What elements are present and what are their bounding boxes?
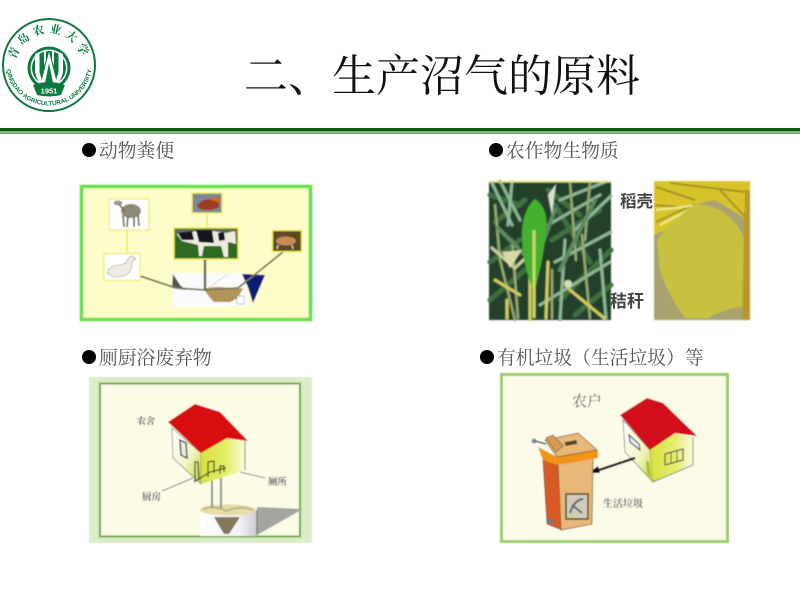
panel: animal manure diagram	[82, 186, 310, 320]
icon: pig	[272, 230, 302, 252]
icon: rooster	[192, 193, 222, 213]
logo: Qingdao Agricultural University	[2, 18, 96, 112]
label: toilet with leader line: 厕所	[268, 476, 288, 488]
label: straw: 秸秆	[610, 291, 644, 311]
label: kitchen with leader line: 厨房	[142, 491, 162, 503]
label: farmer household: 农户	[572, 393, 602, 410]
icon: dairy cows	[174, 228, 238, 259]
pipes to pit	[140, 252, 283, 290]
logo: Qingdao Agricultural University: 1951	[41, 86, 57, 96]
label: rice husk: 稻壳	[620, 191, 654, 211]
photo: yellow husk pile	[654, 181, 750, 320]
icon: sheep	[109, 199, 149, 230]
heading: organic garbage: 有机垃圾（生活垃圾）等	[497, 347, 704, 369]
pipes	[212, 478, 221, 508]
title: 二、生产沼气的原料	[244, 52, 640, 101]
arrow: house to bin	[589, 458, 635, 473]
logo: Qingdao Agricultural University: QINGDAO AGRICULTURAL UNIVERSITY	[6, 68, 92, 106]
icon: goose	[104, 254, 140, 280]
label: household garbage: 生活垃圾	[603, 497, 643, 510]
heading: animal manure: 动物粪便	[99, 140, 174, 162]
photo: corn field	[489, 181, 611, 320]
panel: household waste house diagram	[89, 377, 312, 543]
icon: house with red roof	[620, 398, 697, 482]
icon: biogas pit cutaway	[172, 273, 265, 307]
panel: organic garbage diagram	[502, 374, 728, 542]
icon: orange garbage bin	[532, 433, 598, 530]
label: farmhouse: 农舍	[136, 415, 155, 426]
label: toilet with leader line	[240, 472, 288, 488]
logo: Qingdao Agricultural University: 青岛农业大学	[8, 24, 90, 58]
header divider	[0, 128, 800, 134]
heading: toilet kitchen bath waste: 厕厨浴废弃物	[99, 347, 212, 369]
heading: crop biomass: 农作物生物质	[506, 140, 619, 162]
icon: farmhouse with red roof	[168, 404, 248, 484]
panel: crop biomass photos	[489, 181, 750, 320]
connector lines	[127, 213, 207, 253]
label: kitchen with leader line	[142, 478, 193, 503]
icon: biogas digester	[200, 504, 303, 536]
